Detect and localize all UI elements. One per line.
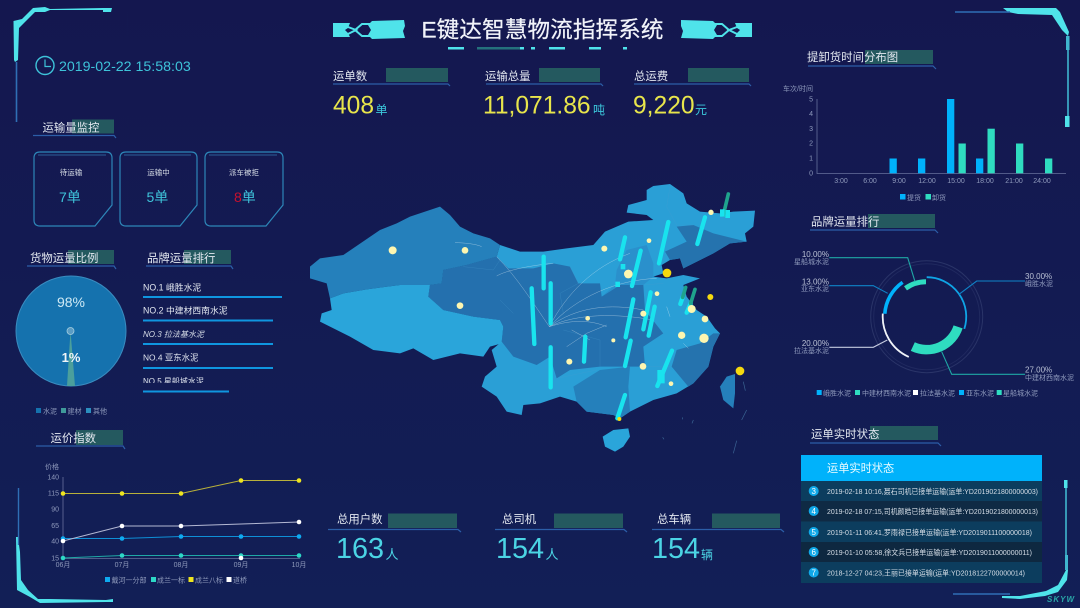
- line chart: 140: [47, 474, 59, 482]
- pie chart: 1%: [62, 350, 81, 365]
- rank 3: NO.3 拉法基水泥: [143, 330, 205, 339]
- heading: 品牌运量排行: [147, 251, 215, 265]
- line chart legend: 道桥: [233, 576, 247, 584]
- callout: 27%: 27.00%: [1025, 366, 1052, 374]
- row 4: [801, 501, 1042, 522]
- bar chart: 0: [809, 170, 813, 178]
- heading: 运输量监控: [42, 120, 99, 134]
- row 6: 2019-01-10 05:58,徐文兵已接单运输(运单:YD2019011000000011): [827, 548, 1032, 557]
- card: pending: 待运输: [60, 167, 83, 177]
- line chart: 07月: [115, 561, 129, 569]
- KPI: waybills: 单: [376, 103, 388, 117]
- KPI: total drivers: 总司机: [502, 512, 537, 526]
- heading: 货物运量比例: [30, 251, 98, 265]
- donut legend: 亚东水泥: [966, 388, 994, 398]
- map: Xinjiang: [310, 207, 500, 298]
- heading: 品牌运量排行: [811, 214, 879, 228]
- KPI: total vehicles: 辆: [701, 548, 713, 562]
- card: in transit: 运输中: [147, 167, 170, 177]
- line chart legend: [105, 576, 247, 584]
- KPI: total volume: 吨: [593, 103, 605, 117]
- card: in transit: 5单: [146, 189, 168, 205]
- callout: 20%: 拉法基水泥: [794, 346, 829, 355]
- China map: [310, 184, 755, 453]
- map: yellow city dots: [389, 210, 714, 386]
- line chart: 15: [51, 556, 59, 562]
- card: pending: 7单: [59, 189, 81, 205]
- bar chart: 21:00: [1005, 178, 1023, 185]
- bar chart: 2: [809, 140, 813, 148]
- line chart: 08月: [174, 561, 188, 569]
- donut legend: 中建材西南水泥: [862, 388, 911, 398]
- row 5: 2019-01-11 06:41,罗雨禄已接单运输(运单:YD2019011100000018): [827, 528, 1032, 537]
- map: province borders: [463, 187, 693, 378]
- bar chart: 6:00: [863, 178, 877, 185]
- KPI: total drivers: 人: [546, 547, 559, 562]
- map: eastern provinces base: [428, 184, 755, 418]
- line chart: 90: [51, 506, 59, 514]
- line chart legend: 成兰八标: [195, 576, 223, 584]
- row 4: 2019-02-18 07:15,司机颜皓已接单运输(运单:YD2019021800000013): [827, 507, 1038, 516]
- map: light mid-north provinces: [602, 245, 653, 297]
- KPI: total vehicles: 154: [652, 533, 700, 565]
- series: blue: [61, 534, 301, 541]
- heading: [810, 214, 938, 233]
- table header: [801, 455, 1042, 481]
- bar chart legend: 提货: [907, 193, 921, 202]
- card: pending: [34, 152, 112, 226]
- frame corner: top left: [14, 7, 112, 122]
- card: refused: 8单: [234, 189, 256, 205]
- panel: transport monitoring: [33, 120, 283, 226]
- KPI: total vehicles: 总车辆: [657, 512, 691, 526]
- heading: 运单实时状态: [811, 427, 879, 441]
- callout: 30%: 峨胜水泥: [1025, 279, 1053, 288]
- rank 2: NO.2 中建材西南水泥: [143, 304, 228, 316]
- donut legend: 星船城水泥: [1003, 388, 1038, 398]
- bar chart: 9:00: [892, 178, 906, 185]
- KPI: total users: 人: [386, 547, 399, 562]
- frame corner: bottom left: [16, 488, 113, 603]
- callout: 13%: 亚东水泥: [801, 284, 829, 293]
- heading: [810, 426, 941, 446]
- pie legend: 建材: [68, 406, 82, 416]
- card: in transit: [120, 152, 197, 226]
- KPI: waybills: 运单数: [333, 69, 368, 83]
- heading: [807, 50, 936, 69]
- row 7: 7: [811, 568, 816, 578]
- KPI: total users: 163: [336, 533, 384, 565]
- title ornament: right: [681, 20, 752, 39]
- KPI: total volume: [483, 68, 605, 120]
- bar chart: 3: [809, 126, 813, 133]
- pie legend: 其他: [93, 406, 107, 416]
- donut chart: [871, 261, 983, 373]
- KPI: total users: 总用户数: [337, 512, 383, 526]
- row 4: 4: [811, 507, 816, 516]
- bar chart legend: [900, 193, 946, 202]
- bar chart: 15:00: [947, 178, 965, 185]
- title ornament: left: [333, 20, 405, 39]
- map: Taiwan: [720, 374, 735, 408]
- callout: 10%: 10.00%: [802, 250, 829, 259]
- series: yellow: [61, 478, 301, 496]
- map: green columns: [683, 194, 728, 303]
- callout: 10%: 星船城水泥: [794, 257, 829, 266]
- series: teal: [61, 553, 301, 560]
- callout: 30%: 30.00%: [1025, 272, 1052, 281]
- panel: freight index line chart: [36, 430, 306, 584]
- map: Hainan: [603, 428, 630, 452]
- title: [333, 18, 752, 50]
- callout: 20%: 20.00%: [802, 339, 829, 348]
- bar chart: 18:00: [976, 178, 994, 185]
- row 7: [801, 562, 1042, 583]
- map: bright yellow dots: [617, 269, 744, 421]
- heading: [27, 250, 116, 269]
- map: Tibet: [320, 285, 503, 360]
- title underline dashes: [448, 47, 627, 50]
- line chart: 09月: [234, 561, 248, 569]
- table header: 运单实时状态: [827, 461, 894, 475]
- row 3: 3: [811, 487, 816, 496]
- heading: 运价指数: [50, 431, 97, 445]
- pie chart: [16, 276, 126, 386]
- line chart: 价格: [45, 462, 59, 471]
- heading: [146, 250, 233, 269]
- heading: [36, 430, 125, 449]
- KPI: total freight: 元: [695, 103, 707, 117]
- bar chart legend: 卸货: [932, 193, 946, 202]
- line chart: 115: [48, 490, 59, 498]
- bar chart: [783, 84, 1066, 185]
- KPI: waybills: [333, 68, 450, 120]
- KPI: total drivers: [495, 512, 627, 565]
- series: white: [61, 520, 301, 560]
- KPI: total vehicles: [652, 512, 784, 565]
- pie chart: 98%: [57, 294, 85, 310]
- line chart: 65: [51, 523, 59, 530]
- line chart legend: 成兰一标: [157, 576, 185, 584]
- row 7: 2018-12-27 04:23,王丽已接单运输(运单:YD2018122700000014): [827, 568, 1025, 578]
- frame corner: bottom right: [953, 480, 1068, 599]
- KPI: total freight: 总运费: [634, 69, 668, 83]
- map: cyan columns: [532, 217, 705, 418]
- map: short column bases: [615, 209, 730, 383]
- panel: waybill status: [801, 426, 1042, 583]
- callout: 10%: [794, 250, 915, 282]
- callout: 13%: 13.00%: [802, 278, 829, 286]
- map: Liaoning and Jilin: [665, 225, 747, 268]
- map: Fujian and Zhejiang: [672, 333, 720, 387]
- panel: brand ranking list: [143, 250, 282, 392]
- panel: loading time bar chart: [783, 50, 1066, 202]
- KPI: total volume: 11,071.86: [483, 92, 591, 120]
- rank 4: NO.4 亚东水泥: [143, 352, 199, 362]
- bar chart: 1: [809, 156, 813, 162]
- line chart: [45, 462, 306, 569]
- line chart: 40: [51, 538, 59, 546]
- KPI: total freight: 9,220: [633, 92, 695, 120]
- map: flight lines: [455, 243, 688, 348]
- bars: unloading: [958, 129, 1052, 173]
- row 6: 6: [811, 548, 816, 557]
- KPI: total users: [328, 512, 461, 565]
- rank 2: [143, 304, 273, 322]
- pie legend: [36, 406, 107, 416]
- KPI: waybills: 408: [333, 92, 374, 120]
- bars: pick-up: [890, 99, 983, 173]
- rank 5: [143, 376, 229, 392]
- map: Guangxi: [573, 367, 630, 418]
- bar chart: 12:00: [918, 178, 936, 185]
- callout: 20%: [794, 339, 887, 355]
- callout: 30%: [959, 272, 1053, 294]
- map: South China Sea islands: [663, 382, 747, 453]
- callout: 27%: 中建材西南水泥: [1025, 373, 1074, 382]
- row 5: [801, 522, 1042, 542]
- donut legend: [817, 388, 1038, 398]
- line chart legend: 戴河一分部: [112, 576, 146, 584]
- row 3: 2019-02-18 10:16,聂石司机已接单运输(运单:YD2019021800000003): [827, 487, 1038, 496]
- panel: cargo ratio pie: [16, 250, 126, 416]
- frame corner: top right: [955, 8, 1070, 127]
- KPI: total volume: 运输总量: [485, 69, 531, 83]
- row 6: [801, 542, 1042, 562]
- bar chart: 4: [809, 111, 813, 118]
- watermark: SKYW: [1047, 595, 1075, 604]
- rank 5: NO.5 星船城水泥: [143, 376, 204, 386]
- map: central provinces: [428, 257, 663, 378]
- rank 1: [143, 282, 282, 298]
- bar chart: 5: [809, 96, 813, 104]
- heading: 提卸货时间分布图: [807, 50, 898, 64]
- callout: 13%: [801, 278, 888, 293]
- donut legend: 拉法基水泥: [920, 388, 955, 398]
- row 5: 5: [811, 528, 816, 537]
- bar chart: 车次/时间: [783, 84, 813, 93]
- card: refused: 派车被拒: [229, 167, 259, 177]
- card: refused: [205, 152, 283, 226]
- title: E键达智慧物流指挥系统: [422, 18, 664, 42]
- donut legend: 峨胜水泥: [823, 388, 851, 398]
- rank 1: NO.1 峨胜水泥: [143, 282, 201, 292]
- row 3: [801, 481, 1042, 501]
- bar chart: 24:00: [1033, 178, 1051, 185]
- pie legend: 水泥: [43, 406, 57, 416]
- callout: 27%: [942, 352, 1074, 382]
- bar chart: 3:00: [834, 178, 848, 185]
- clock and date: 2019-02-22 15:58:03: [59, 59, 191, 75]
- rank 3: [143, 330, 273, 345]
- line chart: 10月: [292, 561, 306, 569]
- KPI: total freight: [633, 68, 751, 120]
- panel: brand ranking donut: [794, 214, 1074, 398]
- rank 4: [143, 352, 273, 369]
- KPI: total drivers: 154: [496, 533, 544, 565]
- heading: [33, 120, 116, 138]
- line chart: 06月: [56, 561, 70, 569]
